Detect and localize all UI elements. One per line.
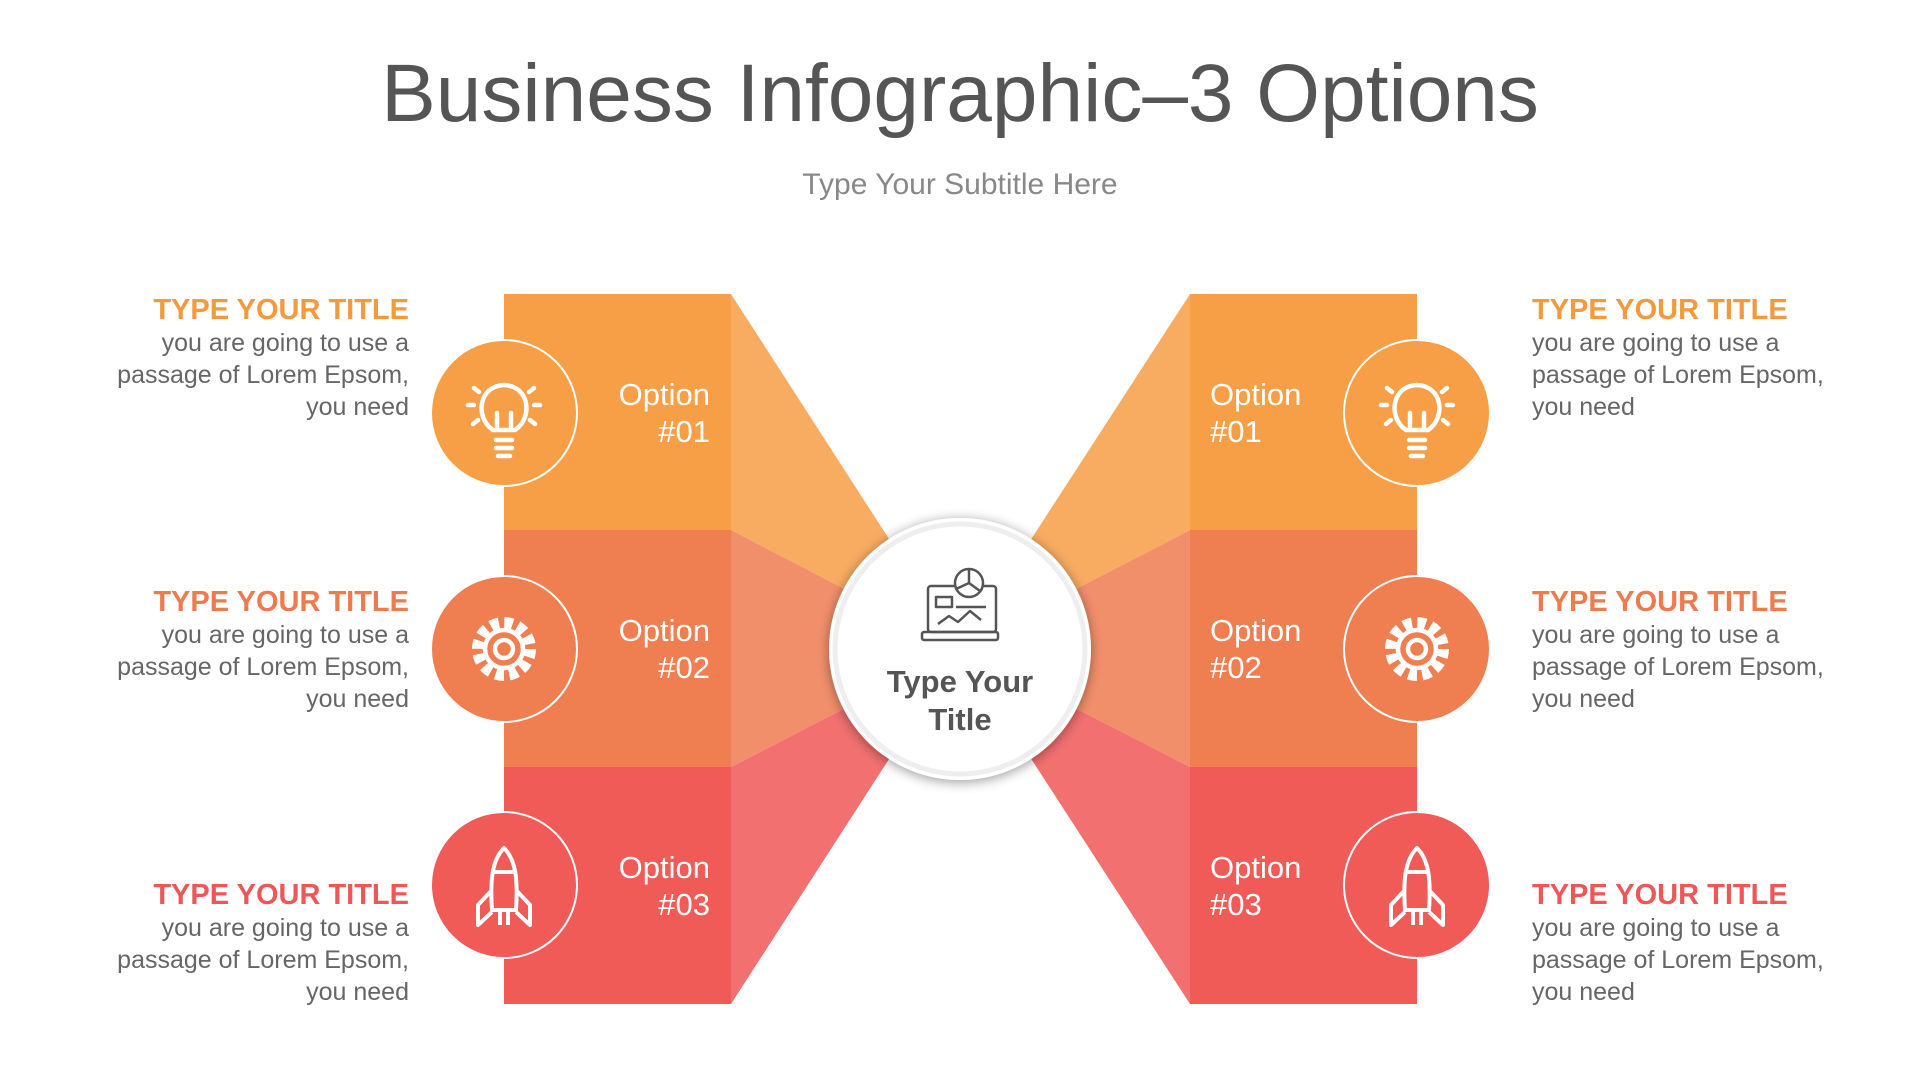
left text 3: you need: [306, 978, 409, 1006]
subtitle: Type Your Subtitle Here: [802, 168, 1118, 201]
right text 3: TYPE YOUR TITLE: [1532, 879, 1788, 911]
left text 1: [117, 294, 410, 421]
right text 2: TYPE YOUR TITLE: [1532, 586, 1788, 618]
left text 3: passage of Lorem Epsom,: [117, 946, 409, 974]
left circle 1: bulb: [431, 340, 577, 486]
left text 1: you are going to use a: [162, 329, 409, 357]
left text 3: [117, 879, 410, 1006]
right text 1: you need: [1532, 393, 1635, 421]
left fan wedges: [731, 294, 960, 1004]
right text 3: you are going to use a: [1532, 914, 1779, 942]
option labels: #01: [658, 414, 710, 449]
right text 1: passage of Lorem Epsom,: [1532, 361, 1824, 389]
left text 3: TYPE YOUR TITLE: [153, 879, 409, 911]
left text 2: passage of Lorem Epsom,: [117, 653, 409, 681]
left bands: [504, 294, 731, 1004]
center circle: Title: [928, 702, 992, 737]
center circle: Type Your: [887, 664, 1033, 699]
right text 2: you are going to use a: [1532, 621, 1779, 649]
option labels: Option: [619, 377, 710, 412]
right fan wedges: [960, 294, 1190, 1004]
right bands: [1190, 294, 1417, 1004]
option labels: Option: [1210, 613, 1301, 648]
left text 2: TYPE YOUR TITLE: [153, 586, 409, 618]
right text 3: [1532, 879, 1824, 1006]
option labels: #02: [658, 650, 710, 685]
right text 1: you are going to use a: [1532, 329, 1779, 357]
right text 3: you need: [1532, 978, 1635, 1006]
option labels: Option: [619, 613, 710, 648]
left text 3: you are going to use a: [162, 914, 409, 942]
right text 1: [1532, 294, 1824, 421]
right circle 2: gear: [1344, 576, 1490, 722]
option labels: Option: [619, 850, 710, 885]
center circle: [829, 518, 1091, 780]
icon: laptop chart: [922, 569, 998, 640]
option labels: Option: [1210, 850, 1301, 885]
option labels: #02: [1210, 650, 1262, 685]
right circle 1: bulb: [1344, 340, 1490, 486]
left circle 3: rocket: [431, 812, 577, 958]
right circle 3: rocket: [1344, 812, 1490, 958]
right text 1: TYPE YOUR TITLE: [1532, 294, 1788, 326]
option labels: Option: [1210, 377, 1301, 412]
right text 2: passage of Lorem Epsom,: [1532, 653, 1824, 681]
left circle 2: gear: [431, 576, 577, 722]
right text 3: passage of Lorem Epsom,: [1532, 946, 1824, 974]
option labels: #03: [1210, 887, 1262, 922]
left text 2: you need: [306, 685, 409, 713]
right text 2: you need: [1532, 685, 1635, 713]
left text 2: [117, 586, 410, 713]
right text 2: [1532, 586, 1824, 713]
left text 1: passage of Lorem Epsom,: [117, 361, 409, 389]
left text 2: you are going to use a: [162, 621, 409, 649]
option labels: #03: [658, 887, 710, 922]
left text 1: you need: [306, 393, 409, 421]
left text 1: TYPE YOUR TITLE: [153, 294, 409, 326]
title: Business Infographic–3 Options: [381, 48, 1539, 139]
option labels: [619, 377, 1301, 922]
option labels: #01: [1210, 414, 1262, 449]
